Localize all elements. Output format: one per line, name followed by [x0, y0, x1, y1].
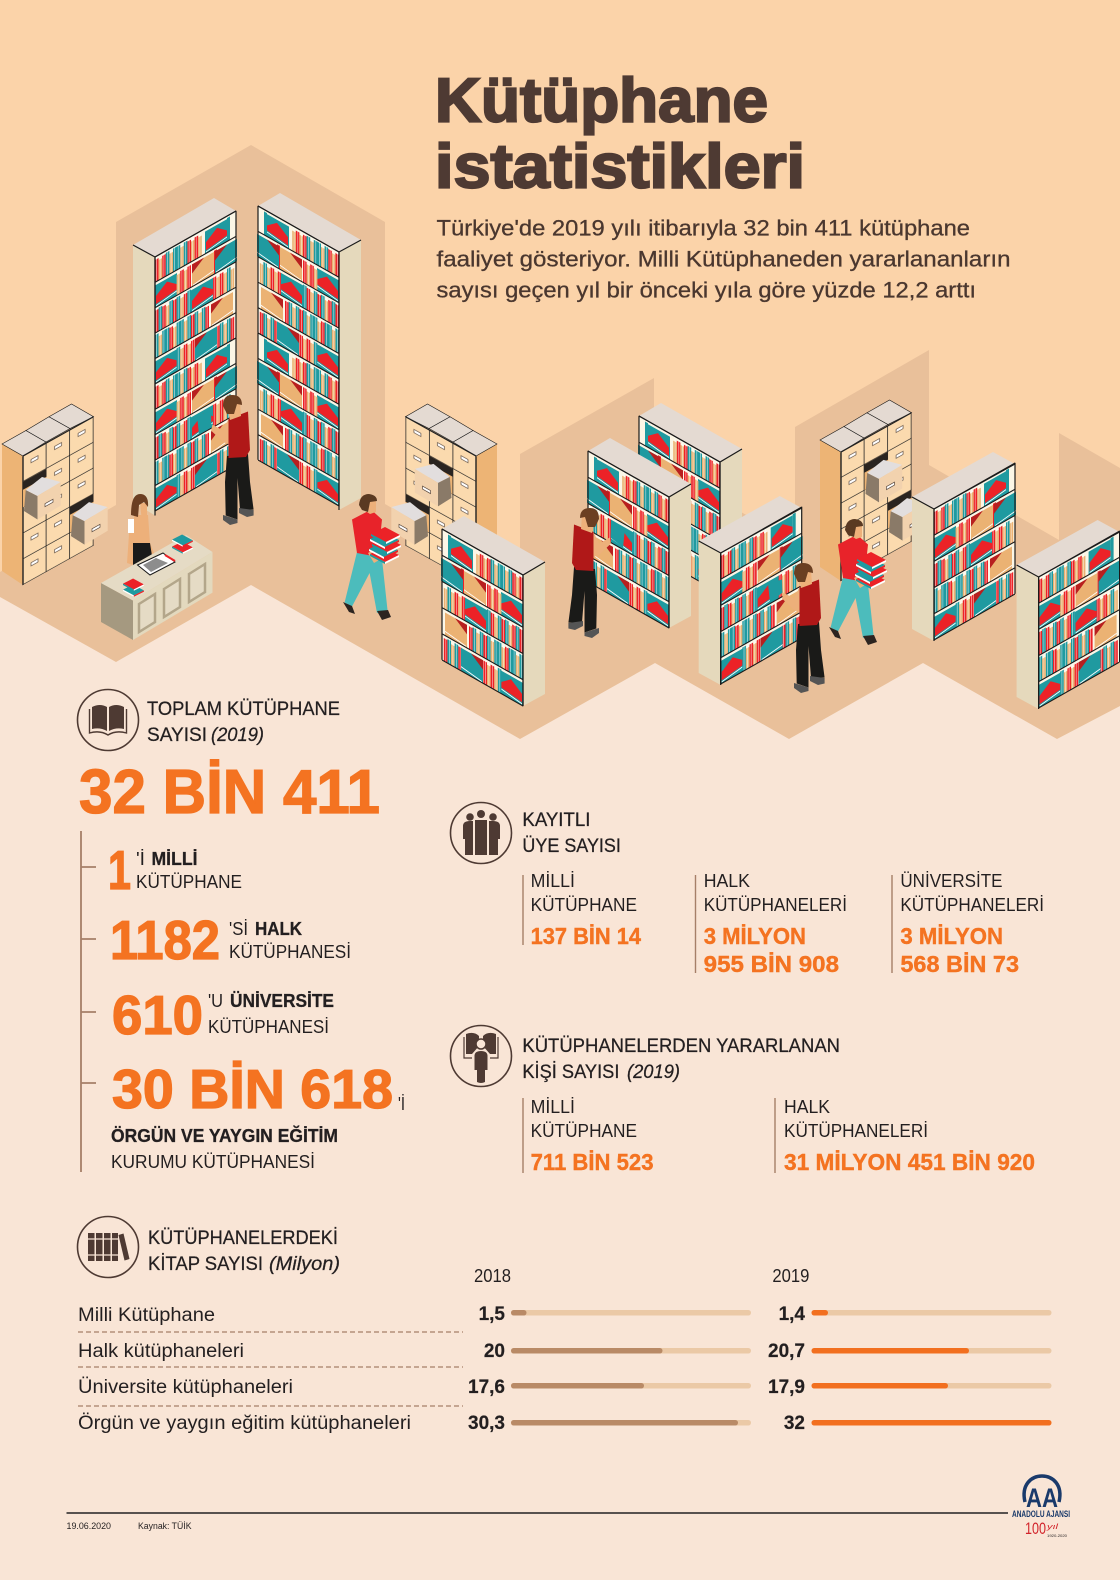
- heading: SAYISI: [147, 725, 207, 746]
- panel: book counts: [78, 1216, 1052, 1434]
- year labels: [474, 1266, 809, 1286]
- item: education: [111, 1058, 405, 1172]
- column: national: KÜTÜPHANE: [531, 895, 637, 915]
- row labels: Halk kütüphaneleri: [78, 1341, 244, 1362]
- item: public: HALK: [255, 919, 302, 939]
- column: public: KÜTÜPHANELERİ: [704, 895, 847, 915]
- column dividers: [523, 1098, 775, 1173]
- librarian: [127, 494, 156, 568]
- item: university: ÜNİVERSİTE: [230, 991, 334, 1011]
- column: public: HALK: [704, 871, 750, 891]
- person carrying books right: [829, 519, 887, 645]
- panel: registered members: [450, 802, 1044, 977]
- logo: Anadolu Ajansi: 100: [1025, 1519, 1046, 1538]
- heading: [147, 699, 340, 746]
- icon: people: [450, 802, 512, 864]
- bar chart: 2018: [468, 1304, 751, 1434]
- row labels: [78, 1305, 463, 1434]
- item: university: [112, 984, 334, 1046]
- heading: [522, 810, 621, 857]
- intro text: sayısı geçen yıl bir önceki yıla göre yüzde 12,2 arttı: [436, 278, 976, 303]
- heading: (Milyon): [269, 1254, 340, 1275]
- item: education: 'İ: [398, 1094, 405, 1114]
- bar chart: 2019: 20,7: [768, 1341, 805, 1362]
- column: national: MİLLİ: [531, 871, 575, 891]
- year labels: 2018: [474, 1266, 511, 1286]
- title: Kütüphane: [435, 67, 768, 136]
- intro text: [436, 216, 1010, 303]
- footer source: Kaynak: TÜİK: [138, 1521, 192, 1531]
- person carrying books: [343, 494, 401, 620]
- bar chart: 2019: 32: [784, 1413, 805, 1434]
- bookshelf: tall left: [133, 198, 237, 516]
- logo: Anadolu Ajansi: [1012, 1476, 1070, 1538]
- item: national: KÜTÜPHANE: [136, 872, 242, 892]
- icon: reader: [450, 1026, 512, 1086]
- column: national: [531, 1097, 654, 1175]
- icon: open book: [78, 690, 138, 750]
- column dividers: [523, 875, 892, 973]
- bookshelf: front left: [441, 516, 545, 706]
- panel: library users: [450, 1026, 1035, 1175]
- column: university: [900, 871, 1044, 977]
- heading: (2019): [211, 725, 264, 746]
- column: public: [784, 1097, 1035, 1175]
- item: university: 610: [112, 984, 203, 1046]
- item: education: ÖRGÜN VE YAYGIN EĞİTİM: [111, 1125, 338, 1146]
- item: national: 'İ: [136, 849, 145, 869]
- heading: [522, 1036, 840, 1083]
- bookshelf: back middle: [638, 403, 742, 593]
- bar chart: 2019: 1,4: [779, 1304, 805, 1325]
- footer rule: [66, 1512, 1008, 1514]
- item: education: 30 BİN 618: [112, 1058, 393, 1120]
- bar chart: 2019: 17,9: [768, 1377, 805, 1398]
- filing cabinet left: [2, 404, 108, 585]
- year labels: 2019: [772, 1266, 809, 1286]
- bookshelf: tall right: [257, 193, 361, 510]
- logo: Anadolu Ajansi: ANADOLU AJANSI: [1012, 1509, 1070, 1519]
- column: public: 3 MİLYON: [704, 923, 806, 949]
- column: national: KÜTÜPHANE: [531, 1121, 637, 1141]
- item: public: KÜTÜPHANESİ: [229, 942, 351, 962]
- column: public: [704, 871, 847, 977]
- item: national: 1: [108, 839, 131, 901]
- bar chart: 2019: [768, 1304, 1052, 1434]
- background top: [0, 0, 1120, 800]
- reception desk: [101, 535, 212, 640]
- item: public: 'Sİ: [229, 919, 248, 939]
- icon: books: [78, 1216, 138, 1278]
- row labels: Üniversite kütüphaneleri: [78, 1377, 293, 1398]
- row labels: Milli Kütüphane: [78, 1305, 215, 1326]
- heading: TOPLAM KÜTÜPHANE: [147, 699, 340, 720]
- heading: ÜYE SAYISI: [522, 836, 621, 857]
- item: national: [108, 839, 242, 901]
- person reaching shelf: [197, 395, 254, 525]
- heading: KİTAP SAYISI: [148, 1254, 263, 1275]
- bar chart: 2018: 20: [484, 1341, 505, 1362]
- logo: Anadolu Ajansi: 1920-2020: [1047, 1533, 1068, 1538]
- column: university: 3 MİLYON: [900, 923, 1003, 949]
- total number: 32 BİN 411: [79, 758, 380, 827]
- column: public: 955 BİN 908: [704, 951, 839, 977]
- heading: KAYITLI: [522, 810, 590, 831]
- row labels: Örgün ve yaygın eğitim kütüphaneleri: [78, 1413, 411, 1434]
- item: national: MİLLİ: [152, 849, 198, 869]
- background lower panel: [0, 585, 1120, 1580]
- item: public: 1182: [110, 909, 220, 971]
- item: university: KÜTÜPHANESİ: [208, 1017, 329, 1037]
- filing cabinet centre: [391, 404, 497, 585]
- item: university: 'U: [208, 991, 223, 1011]
- heading: [148, 1228, 340, 1275]
- person at middle shelf: [568, 508, 625, 638]
- heading: KİŞİ SAYISI: [522, 1062, 619, 1083]
- bookshelf: middle left: [587, 438, 691, 628]
- column: university: ÜNİVERSİTE: [900, 871, 1002, 891]
- title: istatistikleri: [435, 133, 805, 202]
- logo: Anadolu Ajansi: AA: [1026, 1483, 1058, 1513]
- heading: KÜTÜPHANELERDEKİ: [148, 1228, 338, 1249]
- column: university: KÜTÜPHANELERİ: [900, 895, 1044, 915]
- item: public: [110, 909, 351, 971]
- library floor and walls: [0, 145, 1120, 800]
- bookshelf: right: [912, 452, 1016, 641]
- column: national: MİLLİ: [531, 1097, 575, 1117]
- bar chart: 2018: 30,3: [468, 1413, 505, 1434]
- column: public: 31 MİLYON 451 BİN 920: [784, 1149, 1035, 1175]
- intro text: faaliyet gösteriyor. Milli Kütüphaneden yararlananların: [436, 247, 1010, 272]
- panel: total libraries: [78, 690, 405, 1172]
- bracket line: [81, 831, 96, 1172]
- person at front shelf: [768, 563, 825, 693]
- footer date: 19.06.2020: [66, 1521, 111, 1531]
- item: education: KURUMU KÜTÜPHANESİ: [111, 1152, 315, 1172]
- bookshelf: far right: [1017, 520, 1120, 709]
- column: university: 568 BİN 73: [900, 951, 1019, 977]
- column: public: HALK: [784, 1097, 830, 1117]
- bookshelf: middle front: [699, 496, 803, 685]
- bar chart: 2018: 17,6: [468, 1377, 505, 1398]
- bar chart: 2018: 1,5: [479, 1304, 505, 1325]
- column: national: 137 BİN 14: [531, 923, 641, 949]
- logo: Anadolu Ajansi: yıl: [1045, 1524, 1059, 1531]
- intro text: Türkiye'de 2019 yılı itibarıyla 32 bin 411 kütüphane: [436, 216, 970, 241]
- heading: KÜTÜPHANELERDEN YARARLANAN: [522, 1036, 840, 1057]
- column: national: 711 BİN 523: [531, 1149, 654, 1175]
- column: national: [531, 871, 641, 949]
- title: [435, 67, 805, 202]
- filing cabinet right: [820, 400, 926, 581]
- column: public: KÜTÜPHANELERİ: [784, 1121, 928, 1141]
- heading: (2019): [627, 1062, 680, 1083]
